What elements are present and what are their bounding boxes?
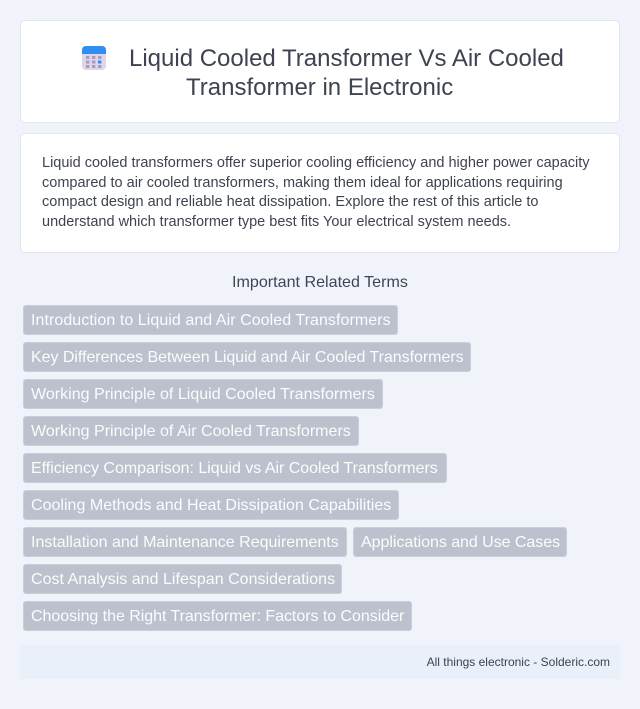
tag [23, 601, 412, 631]
title: Liquid Cooled Transformer Vs Air Cooled [129, 45, 564, 72]
tag [353, 527, 567, 557]
tag: Key Differences Between Liquid and Air Cooled Transformers [31, 349, 464, 366]
title: Transformer in Electronic [186, 74, 453, 101]
heading: related terms: Important Related Terms [232, 273, 408, 291]
tag: Efficiency Comparison: Liquid vs Air Cooled Transformers [31, 460, 438, 477]
tag [23, 564, 342, 594]
tag: Introduction to Liquid and Air Cooled Transformers [31, 312, 391, 329]
summary text: Liquid cooled transformers offer superior cooling efficiency and higher power capacity compared to air cooled transformers, making them ideal for applications requiring compact design and reliable heat dissipation. Explore the rest of this article to understand which transformer type best fits Your electrical system needs. [42, 155, 590, 230]
footer: All things electronic - Solderic.com [427, 655, 610, 669]
icon: calendar grid [82, 46, 106, 70]
footer [20, 645, 620, 679]
tag [23, 527, 347, 557]
tag: Cost Analysis and Lifespan Considerations [31, 571, 335, 588]
tag: Choosing the Right Transformer: Factors to Consider [31, 608, 404, 625]
tag [23, 490, 399, 520]
tag [23, 305, 398, 335]
tag: Installation and Maintenance Requirements [31, 534, 339, 551]
panel: title card [20, 20, 620, 123]
title [129, 45, 564, 101]
tag: Working Principle of Liquid Cooled Transformers [31, 386, 375, 403]
panel: summary card [20, 133, 620, 253]
tag [23, 379, 383, 409]
tag: Working Principle of Air Cooled Transformers [31, 423, 351, 440]
tag [23, 416, 359, 446]
tag list [23, 305, 567, 631]
tag: Cooling Methods and Heat Dissipation Capabilities [31, 497, 391, 514]
tag [23, 342, 471, 372]
tag [23, 453, 447, 483]
tag: Applications and Use Cases [361, 534, 560, 551]
